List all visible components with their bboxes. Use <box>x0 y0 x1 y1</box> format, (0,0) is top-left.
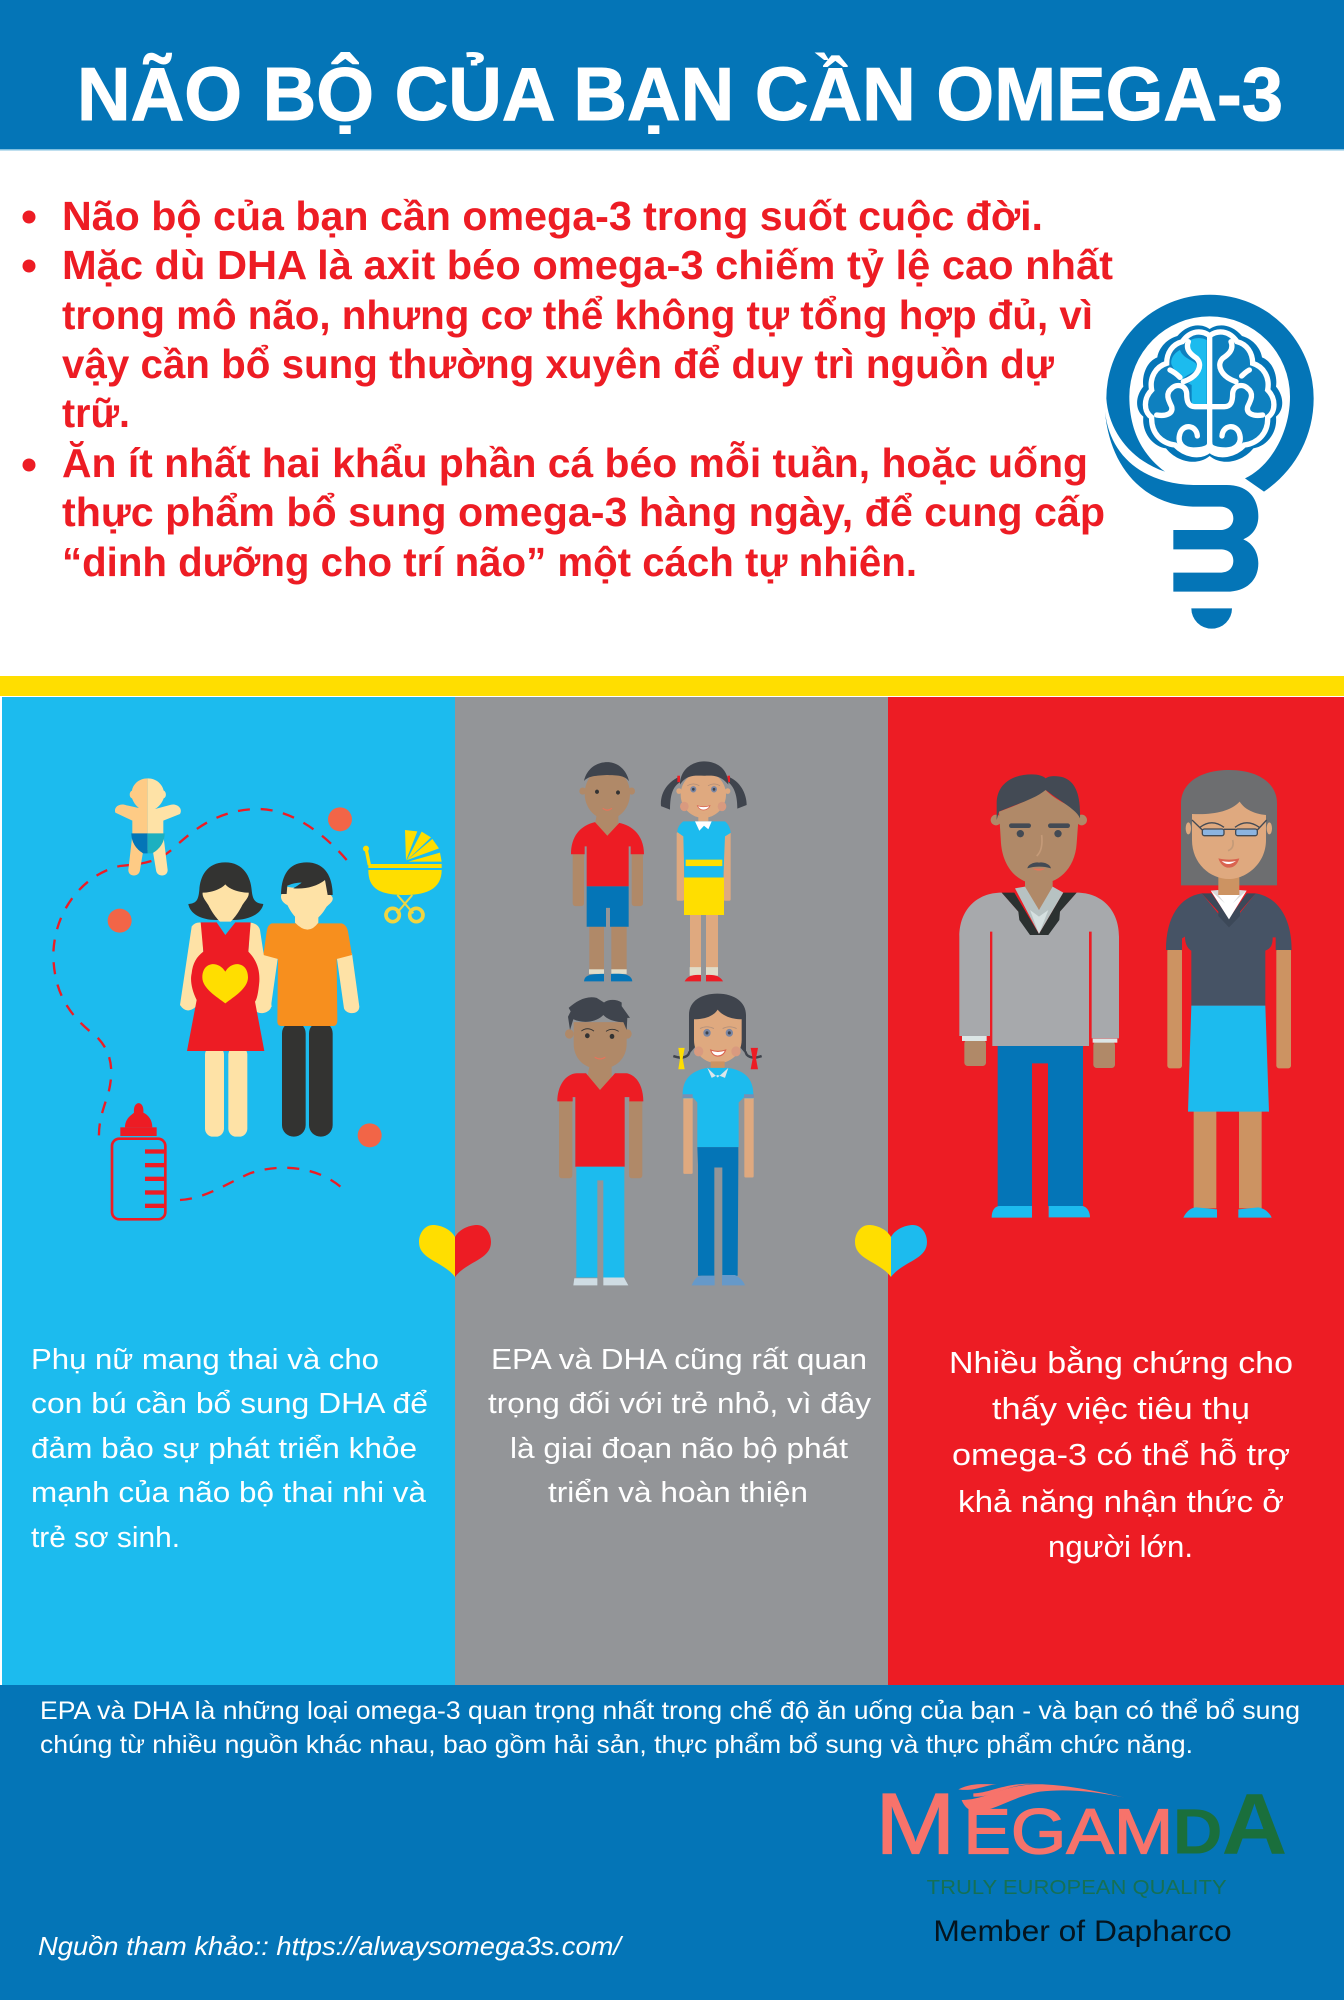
icon: stroller <box>363 830 442 922</box>
bullet 1: Não bộ của bạn cần omega-3 trong suốt cuộc đời. <box>62 193 1043 239</box>
logo: Megamda: D <box>1173 1795 1223 1867</box>
panel text: adults: Nhiều bằng chứng cho <box>949 1345 1293 1380</box>
bullet 2: vậy cần bổ sung thường xuyên để duy trì nguồn dự <box>62 341 1054 387</box>
panel: children <box>455 697 888 1685</box>
panel text: pregnancy: đảm bảo sự phát triển khỏe <box>31 1433 417 1465</box>
panel text: children: triển và hoàn thiện <box>548 1477 808 1509</box>
panel text: adults: người lớn. <box>1048 1529 1193 1564</box>
bullet 2: trữ. <box>62 390 130 436</box>
panel text: pregnancy: trẻ sơ sinh. <box>31 1522 180 1554</box>
panel text: pregnancy: Phụ nữ mang thai và cho <box>31 1344 379 1376</box>
logo: Megamda: M <box>875 1776 955 1872</box>
panel text: adults: khả năng nhận thức ở <box>958 1484 1284 1519</box>
panel text: adults <box>949 1345 1293 1564</box>
logo: Megamda: A <box>1222 1776 1287 1872</box>
bullet 3: thực phẩm bổ sung omega-3 hàng ngày, để cung cấp <box>62 489 1105 535</box>
dashed path <box>53 809 347 1200</box>
pregnant woman <box>180 862 272 1137</box>
logo: Megamda: Member of Dapharco <box>933 1915 1232 1948</box>
panel text: adults: omega-3 có thể hỗ trợ <box>952 1437 1290 1472</box>
dots <box>108 807 382 1147</box>
icon: heart yellow blue <box>855 1225 927 1277</box>
panel text: children: EPA và DHA cũng rất quan <box>491 1344 867 1376</box>
panel: adults <box>888 697 1344 1685</box>
summary text: chúng từ nhiều nguồn khác nhau, bao gồm hải sản, thực phẩm bổ sung và thực phẩm chức năng. <box>40 1731 1193 1759</box>
summary text: EPA và DHA là những loại omega-3 quan trọng nhất trong chế độ ăn uống của bạn - và bạn có thể bổ sung <box>40 1697 1300 1725</box>
adults illustration <box>959 770 1292 1218</box>
header band <box>0 0 1344 150</box>
logo: Megamda <box>875 1776 1287 1948</box>
bullet 3: Ăn ít nhất hai khẩu phần cá béo mỗi tuần, hoặc uống <box>62 440 1088 486</box>
intro bullet list <box>22 193 1113 585</box>
panel text: adults: thấy việc tiêu thụ <box>992 1391 1250 1426</box>
title: NÃO BỘ CỦA BẠN CẦN OMEGA-3 <box>77 52 1283 136</box>
icon: baby <box>115 778 181 875</box>
bullet 2: trong mô não, nhưng cơ thể không tự tổng hợp đủ, vì <box>62 292 1093 338</box>
panel text: children: là giai đoạn não bộ phát <box>510 1433 848 1465</box>
logo: Megamda: EGAM <box>963 1795 1173 1867</box>
woman adult <box>1166 770 1292 1218</box>
summary text <box>40 1697 1300 1759</box>
panel text: pregnancy: mạnh của não bộ thai nhi và <box>31 1477 427 1509</box>
bullet 3 <box>22 440 1105 585</box>
panel: pregnancy and infants <box>2 697 455 1685</box>
panel text: children <box>488 1344 872 1509</box>
yellow divider band <box>0 676 1344 696</box>
man adult <box>959 774 1119 1218</box>
bullet 2: Mặc dù DHA là axit béo omega-3 chiếm tỷ lệ cao nhất <box>62 242 1113 288</box>
boy large <box>557 997 643 1285</box>
icon: brain light bulb with 3 <box>1105 295 1314 629</box>
bullet 3: “dinh dưỡng cho trí não” một cách tự nhiên. <box>62 539 917 585</box>
family illustration <box>53 778 442 1219</box>
icon: baby bottle <box>112 1103 165 1219</box>
footer band <box>0 1685 1344 2000</box>
icon: heart yellow red <box>419 1225 491 1277</box>
bullet 2 <box>22 242 1113 436</box>
girl large <box>673 994 762 1285</box>
panel text: pregnancy: con bú cần bổ sung DHA để <box>31 1388 428 1420</box>
girl small <box>661 761 747 981</box>
source citation: Nguồn tham khảo:: https://alwaysomega3s.com/ <box>38 1931 624 1961</box>
logo: Megamda: TRULY EUROPEAN QUALITY <box>927 1876 1227 1899</box>
children illustration <box>557 761 762 1285</box>
panel text: pregnancy <box>31 1344 428 1554</box>
boy small <box>571 762 644 981</box>
panel text: children: trọng đối với trẻ nhỏ, vì đây <box>488 1388 872 1420</box>
man <box>255 862 359 1137</box>
